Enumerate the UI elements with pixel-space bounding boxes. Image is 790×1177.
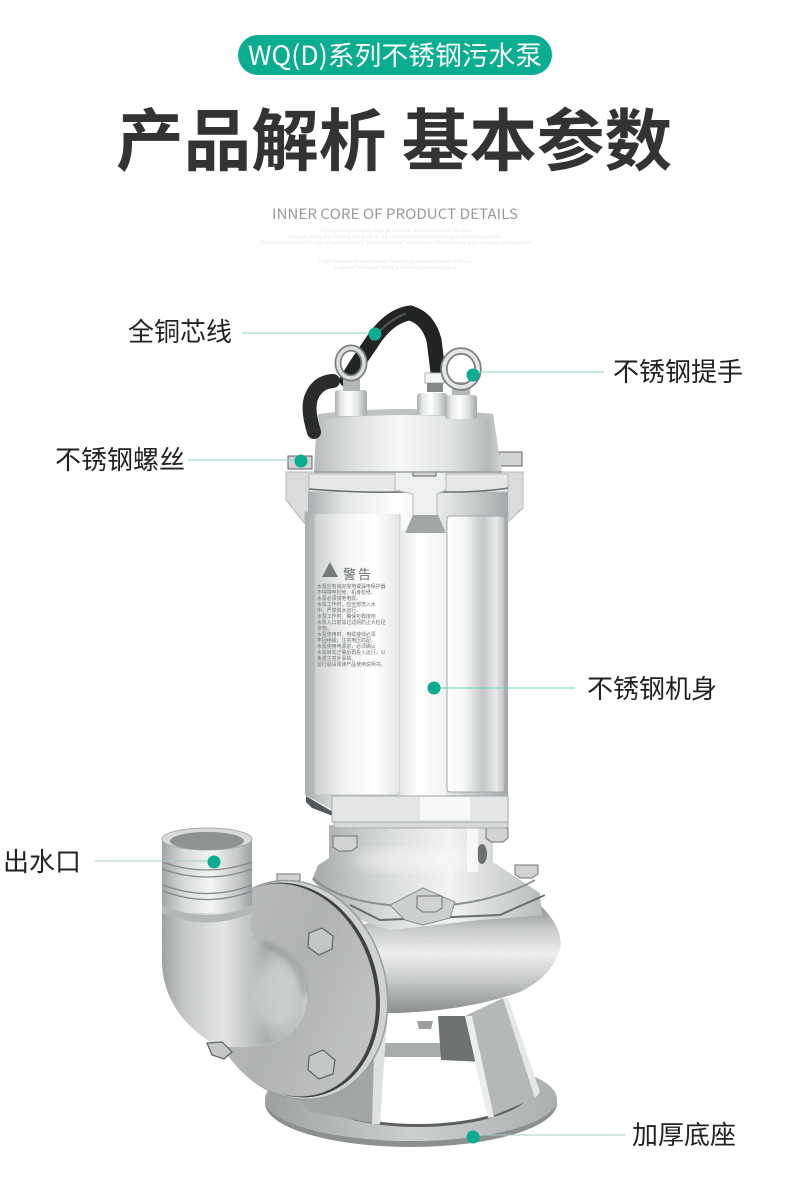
housing bolts bbox=[277, 828, 538, 912]
outlet elbow bbox=[162, 828, 307, 1047]
callout: 不锈钢提手 bbox=[466, 352, 743, 389]
title: 产品解析 基本参数 bbox=[116, 88, 672, 185]
callout: 不锈钢螺丝 bbox=[55, 440, 308, 477]
warning label: 水泵使用时，电缆接线必须 bbox=[317, 631, 376, 638]
lifting eye rings bbox=[338, 348, 478, 387]
warning label: 水泵工作时，应全部潜入水 bbox=[317, 601, 376, 608]
callout: 不锈钢机身 bbox=[428, 669, 717, 706]
callout: 出水口: 出水口 bbox=[3, 842, 81, 879]
faint description text bbox=[259, 227, 531, 271]
faint description text: The brand philosophy of the high-efficiency product is "good and practical", it is the basis of the customers' great innovation and quality first bbox=[259, 239, 531, 246]
warning label: 水泵入口前加过滤网防止大粒径 bbox=[317, 619, 386, 626]
base ring bbox=[265, 1042, 557, 1147]
volute casing bbox=[340, 905, 561, 1013]
warning label: 水泵应有良好接地或漏电保护器 bbox=[317, 583, 386, 590]
motor body bbox=[305, 512, 508, 822]
body collar bbox=[286, 470, 523, 533]
subtitle: INNER CORE OF PRODUCT DETAILS bbox=[272, 203, 518, 224]
warning label: 水泵转向正确后再投入运行，以 bbox=[317, 649, 386, 656]
callout: 不锈钢螺丝: 不锈钢螺丝 bbox=[55, 440, 185, 477]
callout: 出水口 bbox=[3, 842, 220, 879]
warning label: 运行前请阅读产品使用说明书。 bbox=[317, 661, 385, 668]
callout: 全铜芯线 bbox=[128, 312, 382, 349]
warning label: 水泵使用电源前，必须确认 bbox=[317, 643, 376, 650]
motor housing bbox=[312, 825, 545, 930]
pump illustration bbox=[162, 313, 561, 1147]
faint description text: is achieved. The choice of "Strong" is intended to protect every pump bbox=[334, 264, 456, 271]
lifting lugs bbox=[335, 378, 477, 419]
warning label: 水泵必须接地电缆。 bbox=[317, 595, 361, 602]
warning label: 警告 bbox=[343, 564, 373, 583]
cable gland bbox=[417, 373, 447, 415]
faint description text: The long-term open-minded, simple pursue sound, and clear structure for the utility bbox=[319, 227, 472, 234]
warning label bbox=[317, 562, 386, 668]
body lower flange bbox=[306, 795, 508, 828]
warning label: 不得带电检修，机身检修。 bbox=[317, 589, 376, 596]
faint description text: Pumps shall be reliably shaped to detail. Thanks to high resolution the design of the core bbox=[319, 258, 471, 265]
motor top cover bbox=[314, 409, 502, 472]
support legs bbox=[300, 998, 540, 1125]
outlet flange disc bbox=[178, 858, 413, 1122]
callout: 不锈钢提手: 不锈钢提手 bbox=[613, 352, 743, 389]
collar screws bbox=[288, 452, 522, 476]
warning label: 牢固绝缘，注意电压匹配。 bbox=[317, 637, 376, 644]
warning label: 杂物。 bbox=[317, 625, 332, 632]
callout: 不锈钢机身: 不锈钢机身 bbox=[587, 669, 717, 706]
cable bbox=[310, 313, 438, 432]
badge: product series: WQ(D)系列不锈钢污水泵 bbox=[248, 34, 542, 73]
faint description text: Since its early, the factory has built an all-round stainless steel pump production system bbox=[288, 233, 502, 240]
flange bolts bbox=[207, 928, 335, 1079]
warning label: 免发生意外事故。 bbox=[317, 655, 356, 662]
warning label: 中，严禁脱水运行。 bbox=[317, 607, 361, 614]
callout: 加厚底座: 加厚底座 bbox=[632, 1115, 736, 1152]
callout: 加厚底座 bbox=[466, 1115, 736, 1152]
callout: 全铜芯线: 全铜芯线 bbox=[128, 312, 232, 349]
warning label: 水泵工作时，确保可靠接地 bbox=[317, 613, 376, 620]
